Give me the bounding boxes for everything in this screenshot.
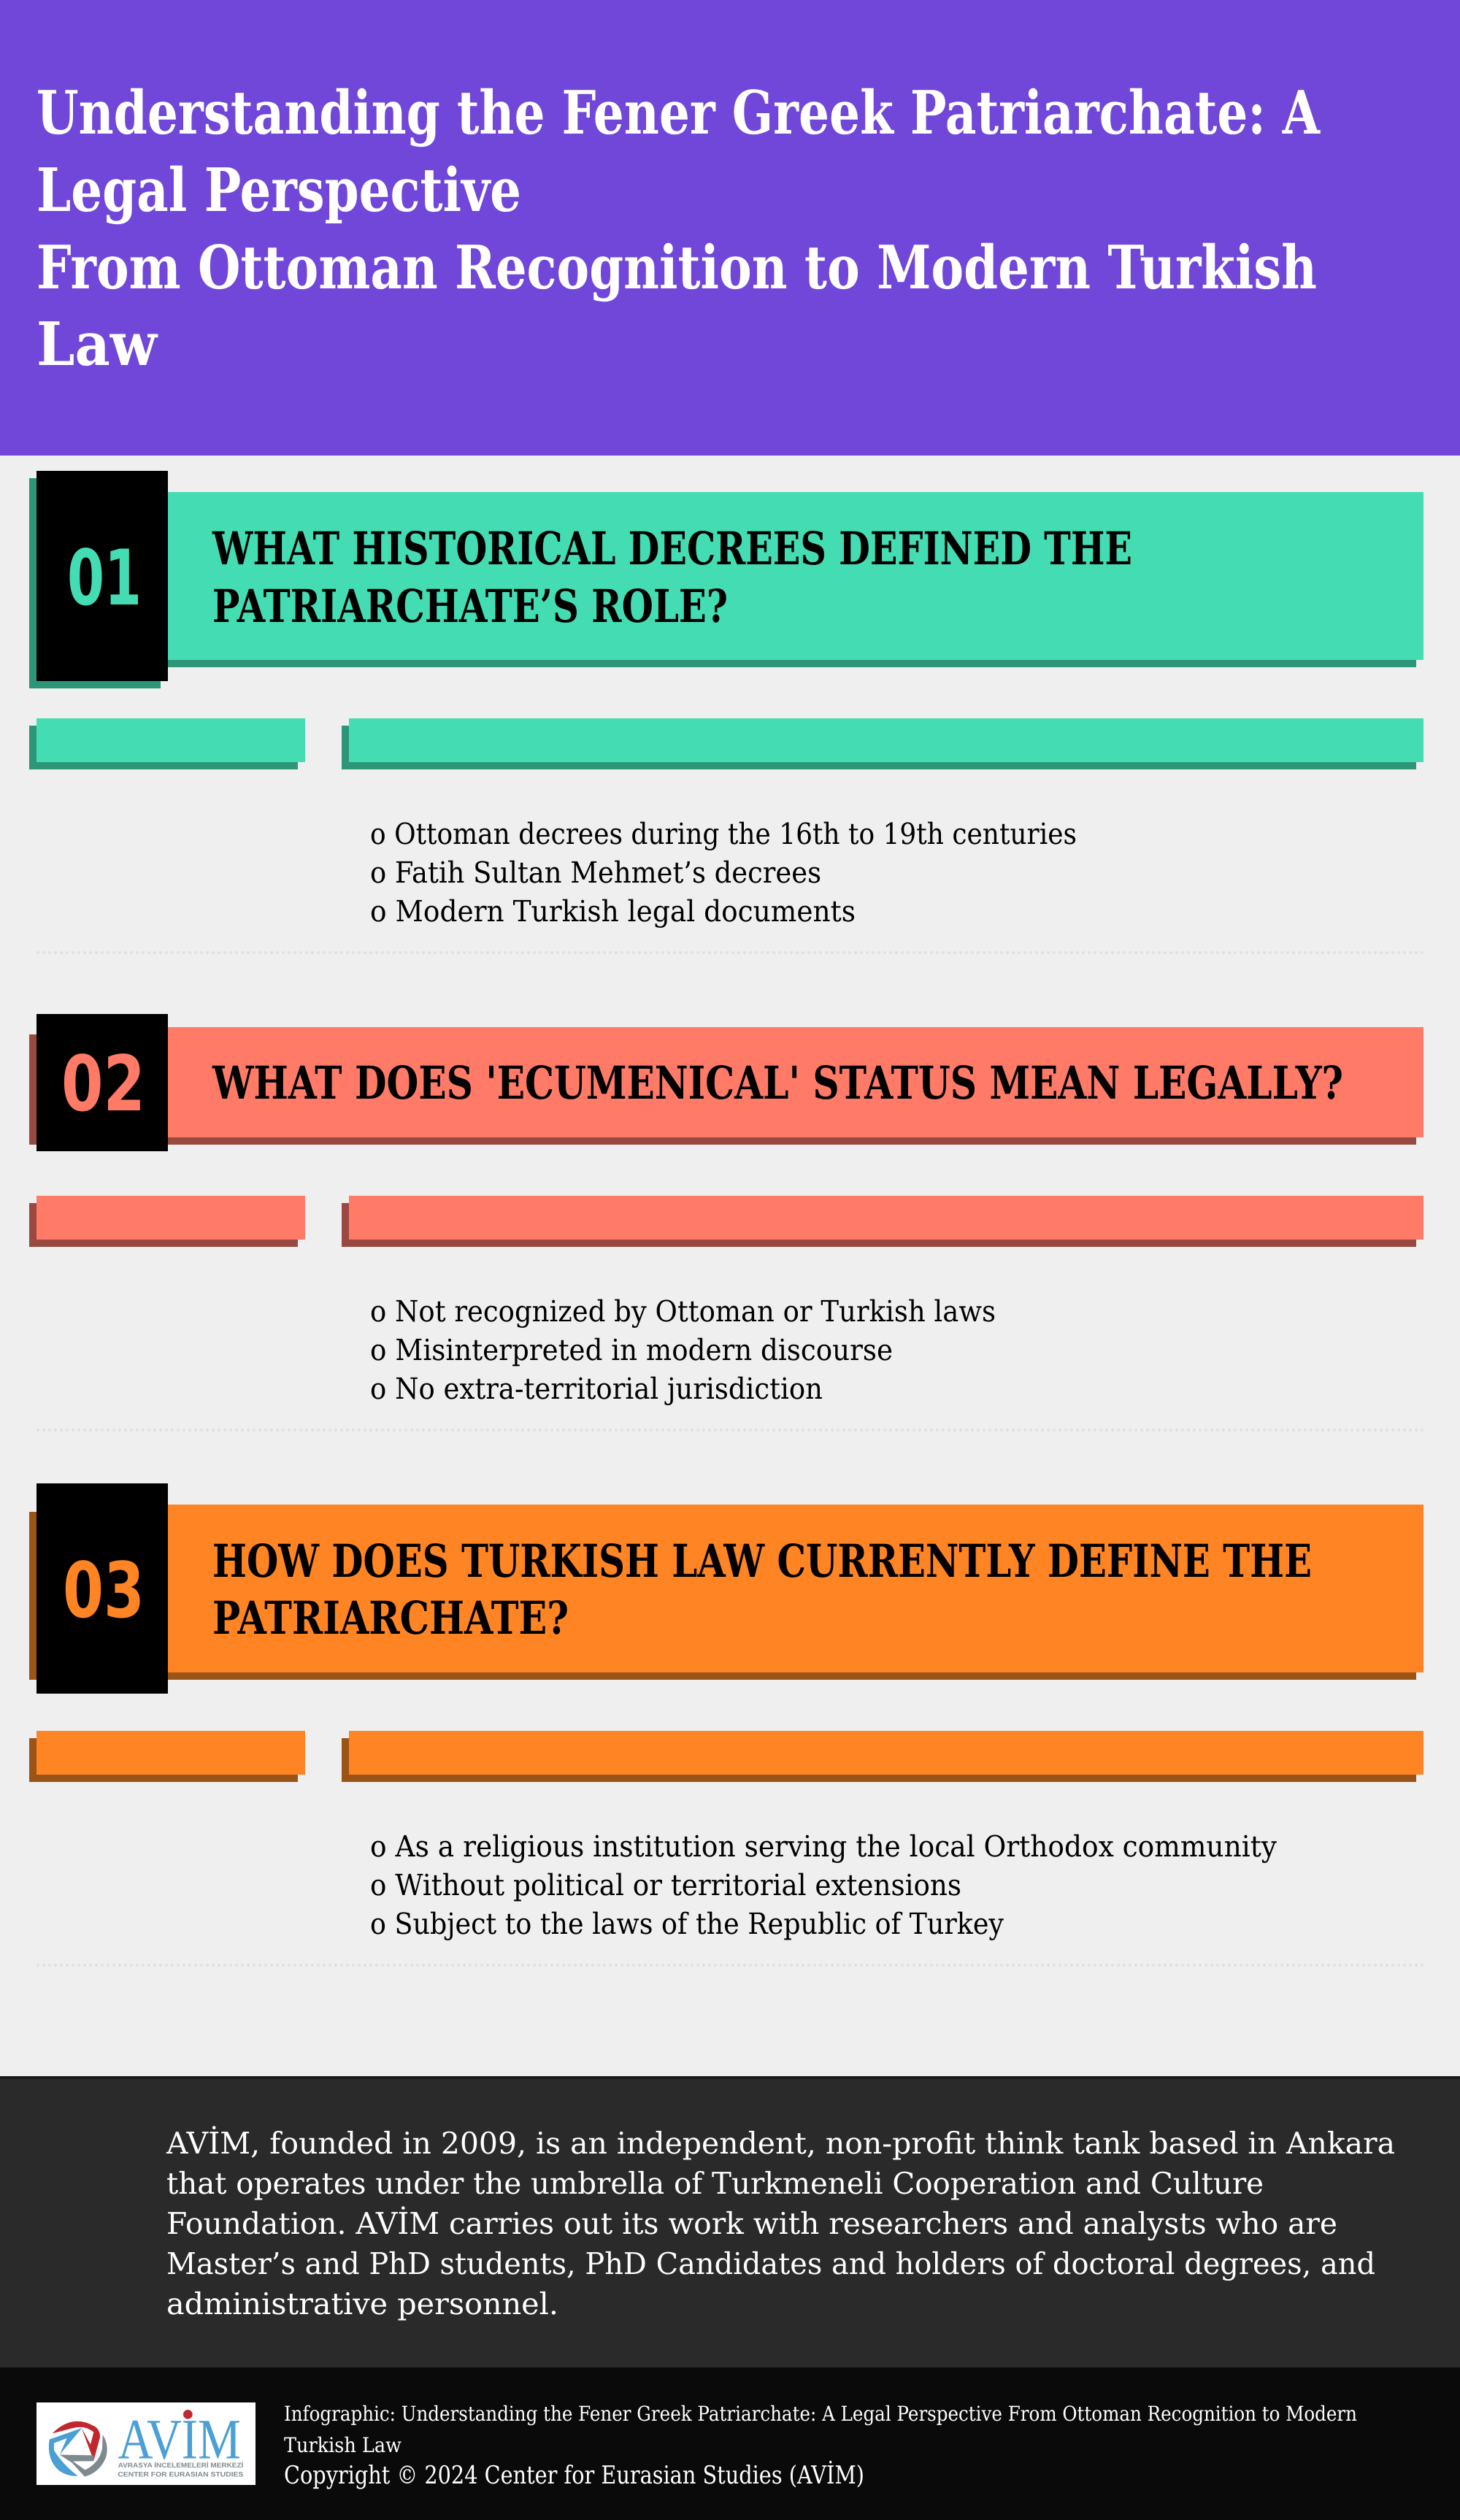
logo subtitle: CENTER FOR EURASIAN STUDIES <box>118 2470 243 2478</box>
number badge 01: 01 <box>67 534 142 623</box>
logo subtitle <box>118 2462 243 2478</box>
bullet list 01: o Modern Turkish legal documents <box>370 895 856 929</box>
left sub-bar 03 <box>29 1731 305 1782</box>
bullet list 03: o As a religious institution serving the local Orthodox community <box>370 1830 1277 1864</box>
bullet list 03 <box>370 1830 1277 1941</box>
bullet list 02: o Not recognized by Ottoman or Turkish laws <box>370 1295 996 1329</box>
bullet list 02 <box>370 1295 996 1406</box>
panel: section 01 <box>29 471 1424 953</box>
left sub-bar 02 <box>29 1196 305 1247</box>
bullet list 01 <box>370 818 1077 929</box>
about text <box>166 2126 1395 2321</box>
number badge 03 <box>36 1483 168 1694</box>
left sub-bar 01 <box>29 718 305 769</box>
heading bar 01: PATRIARCHATE’S ROLE? <box>212 580 728 633</box>
icon: gray arc <box>60 2435 107 2477</box>
title: Law <box>36 310 158 380</box>
footer credit text: Copyright © 2024 Center for Eurasian Studies (AVİM) <box>284 2460 864 2490</box>
number badge 02: 02 <box>61 1040 145 1129</box>
number badge 01 <box>29 471 168 688</box>
about text: administrative personnel. <box>166 2286 558 2321</box>
heading bar 01 <box>29 492 1424 667</box>
header panel <box>0 0 1460 456</box>
title <box>36 78 1321 380</box>
panel: section 02 <box>29 1014 1424 1430</box>
icon: red arc <box>53 2421 100 2461</box>
bullet list 02: o Misinterpreted in modern discourse <box>370 1334 893 1367</box>
icon: blue arc <box>49 2428 82 2476</box>
logo subtitle: AVRASYA İNCELEMELERİ MERKEZİ <box>118 2462 243 2469</box>
heading bar 03 <box>29 1505 1424 1680</box>
bullet list 03: o Without political or territorial extensions <box>370 1869 961 1902</box>
footer credit text: Turkish Law <box>284 2433 402 2457</box>
right sub-bar 01 <box>342 718 1424 769</box>
title: Legal Perspective <box>36 155 521 226</box>
heading bar 01: WHAT HISTORICAL DECREES DEFINED THE <box>212 522 1132 575</box>
about text: Master’s and PhD students, PhD Candidates and holders of doctoral degrees, and <box>166 2246 1375 2281</box>
panel: footer <box>0 2367 1460 2520</box>
bullet list 01: o Fatih Sultan Mehmet’s decrees <box>370 856 821 890</box>
number badge 03: 03 <box>63 1546 145 1635</box>
footer credit text <box>284 2402 1357 2490</box>
bullet list 03: o Subject to the laws of the Republic of Turkey <box>370 1908 1004 1941</box>
right sub-bar 02 <box>342 1196 1424 1247</box>
bullet list 02: o No extra-territorial jurisdiction <box>370 1372 823 1406</box>
logo: AVIM <box>36 2402 256 2485</box>
panel: section 03 <box>29 1483 1424 1965</box>
heading bar 03: PATRIARCHATE? <box>212 1591 569 1645</box>
number badge 02 <box>36 1014 168 1151</box>
logo wordmark: AVİM <box>118 2408 241 2471</box>
about text: that operates under the umbrella of Turkmeneli Cooperation and Culture <box>166 2166 1264 2201</box>
bullet list 01: o Ottoman decrees during the 16th to 19th centuries <box>370 818 1077 851</box>
heading bar 02 <box>29 1027 1424 1145</box>
right sub-bar 03 <box>342 1731 1424 1782</box>
about text: AVİM, founded in 2009, is an independent, non-profit think tank based in Ankara <box>166 2126 1395 2161</box>
about text: Foundation. AVİM carries out its work with researchers and analysts who are <box>166 2206 1337 2241</box>
panel: about AVIM <box>0 2076 1460 2367</box>
